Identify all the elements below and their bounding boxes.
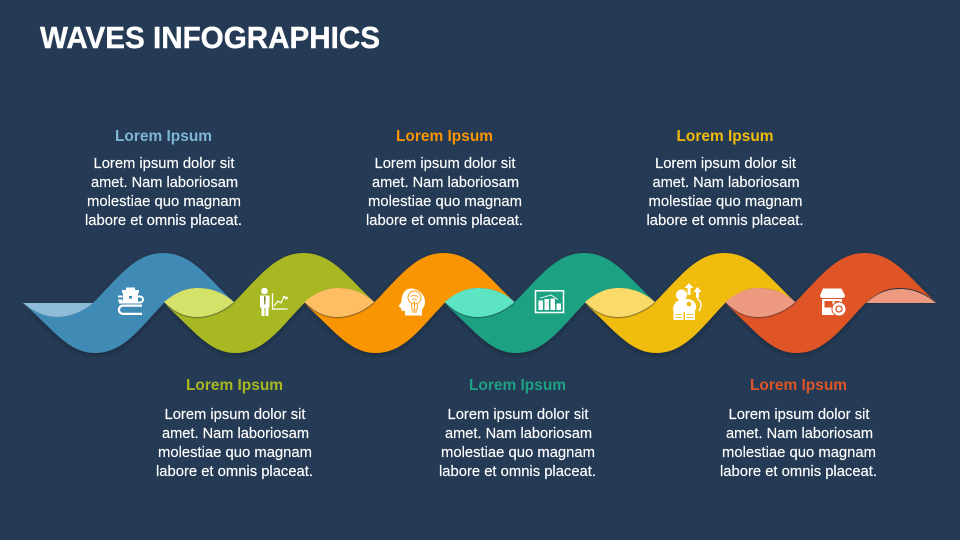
body: molestiae quo magnam [441, 444, 595, 461]
icon: businessman with chart [260, 288, 288, 316]
text block: top left [85, 128, 242, 229]
heading: Lorem Ipsum [396, 128, 493, 145]
text block: bottom centre [439, 377, 596, 480]
body: Lorem ipsum dolor sit [164, 406, 306, 423]
wave band: blue [23, 253, 234, 353]
body: Lorem ipsum dolor sit [655, 155, 797, 172]
lens: salmon [725, 288, 795, 317]
text block: bottom left [156, 377, 313, 480]
lens: light yellow [585, 288, 655, 317]
body: labore et omnis placeat. [156, 463, 313, 480]
lens: light teal [445, 288, 515, 317]
text block: top centre [366, 128, 523, 229]
body: amet. Nam laboriosam [372, 174, 519, 191]
body: Lorem ipsum dolor sit [728, 406, 870, 423]
body: labore et omnis placeat. [646, 212, 804, 229]
body: molestiae quo magnam [722, 444, 876, 461]
heading: Lorem Ipsum [676, 128, 774, 145]
icon: head with light bulb [398, 288, 425, 316]
body: Lorem ipsum dolor sit [94, 155, 235, 172]
heading: Lorem Ipsum [750, 377, 847, 394]
lens: light blue [23, 303, 93, 317]
body: labore et omnis placeat. [720, 463, 877, 480]
heading: Lorem Ipsum [469, 377, 566, 394]
body: amet. Nam laboriosam [162, 425, 309, 442]
body: amet. Nam laboriosam [726, 425, 873, 442]
icon: coins with growth arrows [673, 283, 702, 320]
body: Lorem ipsum dolor sit [374, 155, 516, 172]
heading: Lorem Ipsum [186, 377, 283, 394]
body: labore et omnis placeat. [366, 212, 523, 229]
body [156, 406, 313, 480]
body: molestiae quo magnam [87, 193, 241, 210]
icon: books and briefcase [118, 288, 144, 315]
lens: light orange [304, 288, 374, 317]
body [366, 155, 523, 229]
body [85, 155, 242, 229]
icon: bar chart board [536, 291, 564, 312]
title: WAVES INFOGRAPHICS [40, 20, 380, 55]
wave band: yellow [584, 253, 795, 353]
body [646, 155, 804, 229]
icon: shop with gear [820, 288, 846, 316]
body: molestiae quo magnam [368, 193, 522, 210]
wave band: teal [444, 253, 655, 353]
wave band: orange [304, 253, 515, 353]
body: amet. Nam laboriosam [652, 174, 800, 191]
text block: top right [646, 128, 804, 229]
wave band: red [724, 253, 936, 353]
text block: bottom right [720, 377, 877, 480]
heading: Lorem Ipsum [115, 128, 212, 145]
wave band: green [163, 253, 374, 353]
wave ribbon [23, 253, 936, 353]
body [720, 406, 877, 480]
lens: light green [164, 288, 234, 317]
body: labore et omnis placeat. [85, 212, 242, 229]
body [439, 406, 596, 480]
body: molestiae quo magnam [158, 444, 312, 461]
body: labore et omnis placeat. [439, 463, 596, 480]
body: molestiae quo magnam [648, 193, 802, 210]
body: amet. Nam laboriosam [91, 174, 238, 191]
lens: salmon end [866, 289, 936, 303]
body: amet. Nam laboriosam [445, 425, 592, 442]
body: Lorem ipsum dolor sit [448, 406, 589, 423]
